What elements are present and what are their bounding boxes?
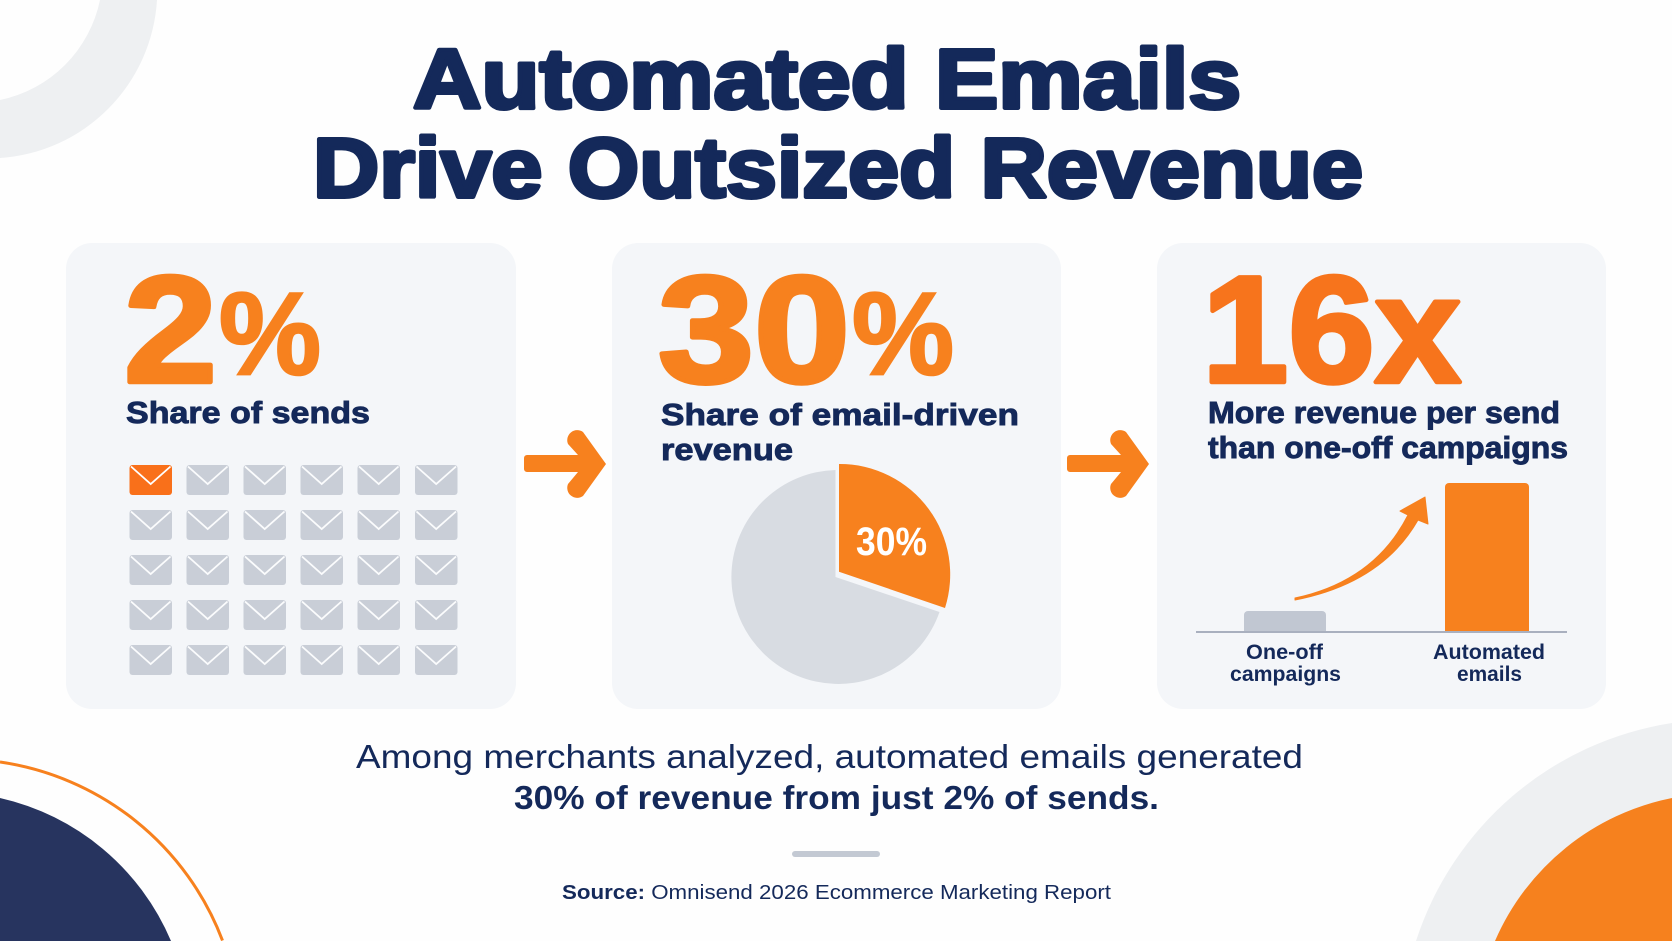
title: Automated Emails: [413, 32, 1241, 126]
icon: highlighted orange envelope: [130, 465, 172, 495]
summary text: Among merchants analyzed, automated emails generated: [356, 738, 1303, 775]
label: share of email-driven revenue: [661, 397, 1019, 467]
axis line: [1196, 631, 1567, 633]
label: share of sends: Share of sends: [126, 395, 370, 430]
stat: 30%: %: [852, 268, 954, 399]
bar: one-off campaigns: [1244, 611, 1326, 632]
decoration: bottom-left navy circle and orange ring: [0, 762, 222, 941]
arrow: growth curve: [1295, 497, 1428, 600]
stat: 2%: [124, 245, 321, 415]
stat: 30%: [658, 245, 954, 415]
stat: 16x: 16x: [1202, 245, 1461, 415]
panel: share of revenue: [612, 243, 1061, 709]
source line: Source: Omnisend 2026 Ecommerce Marketing Report: [562, 881, 1111, 904]
stat: 30%: 30: [658, 245, 850, 415]
title: [313, 32, 1363, 215]
summary text: [356, 738, 1303, 816]
axis label: one-off campaigns: [1230, 641, 1341, 686]
arrow: sends to revenue: [524, 430, 606, 498]
label: more revenue per send: than one-off campaigns: [1208, 430, 1568, 465]
panel: revenue per send: [1157, 243, 1606, 709]
axis label: one-off campaigns: One-off: [1246, 641, 1324, 664]
axis label: automated emails: [1433, 641, 1545, 686]
pie chart: 30 percent slice: [731, 464, 950, 684]
label: share of email-driven revenue: Share of email-driven: [661, 397, 1019, 432]
axis label: automated emails: Automated: [1433, 641, 1545, 664]
divider: [792, 851, 880, 857]
label: more revenue per send: More revenue per send: [1208, 395, 1560, 430]
label: more revenue per send: [1208, 395, 1568, 465]
decoration: top-left ring: [0, 0, 157, 158]
panel: share of sends: [66, 243, 516, 709]
title: Drive Outsized Revenue: [313, 121, 1363, 215]
decoration: bottom-right grey and orange circles: [1416, 723, 1672, 941]
stat: 2%: 2: [124, 245, 217, 415]
stat: 2%: %: [219, 268, 321, 399]
axis label: automated emails: emails: [1457, 663, 1522, 686]
axis label: one-off campaigns: campaigns: [1230, 663, 1341, 686]
bar chart: one-off vs automated: [1196, 483, 1567, 686]
pie chart: 30 percent slice: 30%: [856, 520, 927, 564]
bar: automated emails: [1445, 483, 1529, 632]
summary text: 30% of revenue from just 2% of sends.: [514, 779, 1159, 816]
arrow: revenue to multiple: [1067, 430, 1149, 498]
icon grid: 30 envelopes, one highlighted: [130, 465, 458, 675]
label: share of email-driven revenue: revenue: [661, 432, 793, 467]
